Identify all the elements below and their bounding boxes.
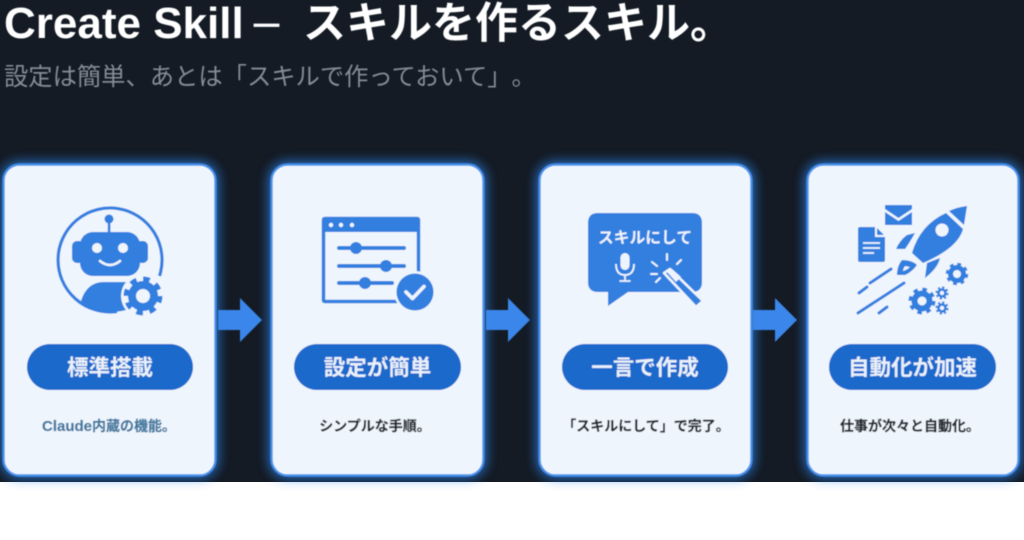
title: スキルを作るスキル。 [303,0,733,48]
label pill [829,344,996,390]
panel: create in one phrase [536,161,755,479]
title: Create Skill [4,0,244,48]
icon: robot with gear [58,208,165,318]
icon: rocket with documents and gears [858,205,967,314]
caption: シンプルな手順。 [319,418,431,434]
icon: settings window with check [322,217,436,313]
caption: 「スキルにして」で完了。 [562,418,730,434]
label pill: 自動化が加速 [848,355,977,380]
panel: standard feature [0,161,219,479]
icon: speech bubble with mic and wand [588,213,703,307]
caption: Claude内蔵の機能。 [42,418,176,435]
arrow [218,298,262,342]
arrow [486,298,530,342]
panel: automation accelerates [804,161,1022,479]
panel: easy setup [268,161,487,479]
caption: 仕事が次々と自動化。 [840,418,980,434]
label pill [294,344,461,390]
label pill: 標準搭載 [67,356,153,380]
title: — [254,10,279,38]
label pill [27,344,193,390]
label pill: 一言で作成 [591,356,699,380]
icon: speech bubble with mic and wand: スキルにして [598,229,692,247]
label pill: 設定が簡単 [324,355,431,380]
label pill [562,344,728,390]
subtitle: 設定は簡単、あとは「スキルで作っておいて」。 [4,64,536,91]
arrow [753,298,797,342]
